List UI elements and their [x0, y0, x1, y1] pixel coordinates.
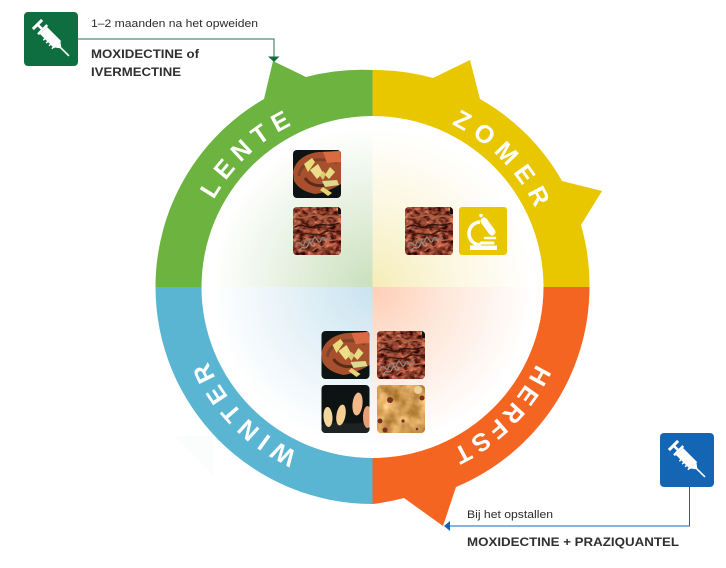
zomer photo: wormen: [405, 207, 453, 255]
callout text: lente timing: 1–2 maanden na het opweiden: [91, 18, 258, 30]
arrow: herfst callout: [444, 487, 690, 531]
callout text: herfst timing: Bij het opstallen: [467, 509, 553, 521]
season segment: lente: LENTE: [200, 110, 291, 198]
season segment: zomer: [372, 60, 602, 287]
season segment: lente: [156, 61, 372, 287]
winter photo: larven: [322, 385, 372, 433]
callout text: lente medication: [91, 47, 200, 79]
season segment: zomer: ZOMER: [452, 110, 548, 208]
season segment: herfst: HERFST: [457, 365, 551, 465]
season segment: winter: WINTER: [194, 362, 294, 468]
icon: green syringe: [24, 12, 78, 66]
callout text: herfst medication: MOXIDECTINE + PRAZIQUANTEL: [467, 535, 679, 549]
lente photo: wormen: [293, 207, 341, 255]
herfst photo: lever: [377, 385, 425, 433]
season segment: winter: [156, 287, 372, 504]
seasonal wheel: [156, 60, 602, 526]
season segment: herfst: [372, 287, 590, 526]
arrow: lente callout: [78, 39, 280, 62]
faint ghost shape lower left: [175, 436, 213, 476]
winter photo: horzellarven: [322, 331, 370, 379]
callout text: lente medication: MOXIDECTINE of: [91, 47, 200, 61]
callout text: lente medication: IVERMECTINE: [91, 65, 181, 79]
lente photo: horzellarven: [293, 150, 341, 198]
icon: microscope: [459, 207, 507, 255]
herfst photo: wormen: [377, 331, 425, 379]
icon: blue syringe: [660, 433, 714, 487]
inner disc gradients: [233, 147, 514, 428]
